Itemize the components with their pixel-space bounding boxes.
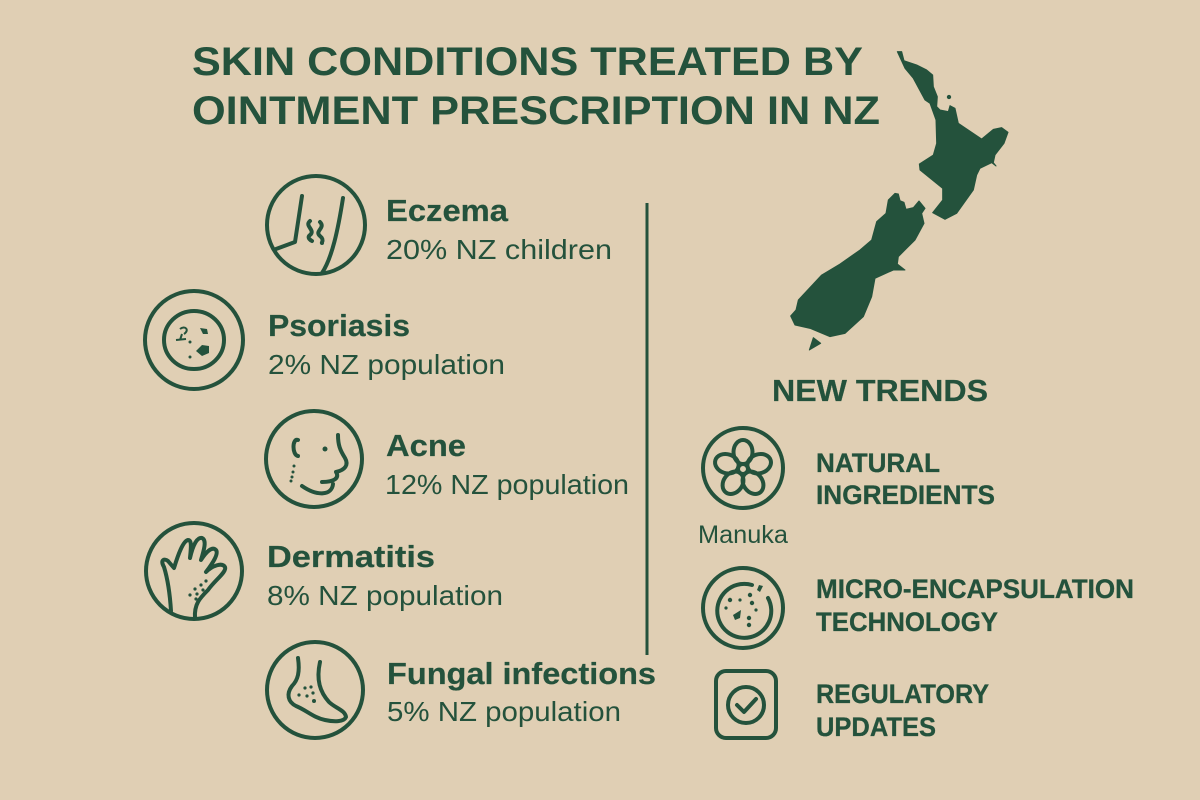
icon: elbow — [267, 176, 365, 274]
stat: Eczema: 20% NZ children — [386, 234, 612, 265]
label: Regulatory updates: REGULATORY — [816, 679, 989, 709]
trend: Natural ingredients — [698, 428, 995, 549]
title — [192, 40, 880, 133]
label: Eczema: Eczema — [386, 193, 509, 228]
icon: flower — [703, 428, 783, 508]
condition: Fungal infections — [267, 642, 656, 738]
condition: Dermatitis — [146, 523, 503, 619]
trend: Natural ingredients: INGREDIENTS — [816, 480, 995, 510]
condition: Psoriasis — [145, 291, 505, 389]
icon: skin patches — [145, 291, 243, 389]
stat: Dermatitis: 8% NZ population — [267, 580, 503, 611]
title: OINTMENT PRESCRIPTION IN NZ — [192, 89, 880, 133]
icon: foot — [267, 642, 363, 738]
stat: Psoriasis: 2% NZ population — [268, 349, 505, 380]
label: Natural ingredients: NATURAL — [816, 448, 940, 478]
stat: Acne: 12% NZ population — [385, 469, 629, 500]
stat: Fungal infections: 5% NZ population — [387, 696, 621, 727]
map: New Zealand — [791, 52, 1008, 350]
title: SKIN CONDITIONS TREATED BY — [192, 40, 863, 84]
trend: Regulatory updates: UPDATES — [816, 712, 936, 742]
heading: New Trends: NEW TRENDS — [772, 373, 988, 408]
icon: face profile — [266, 411, 362, 507]
divider — [646, 203, 648, 655]
label: Fungal infections: Fungal infections — [387, 656, 656, 691]
trend: Regulatory updates — [716, 671, 989, 742]
trend: Micro-encapsulation technology — [703, 568, 1134, 648]
condition: Eczema — [267, 176, 612, 274]
label: Acne: Acne — [386, 428, 466, 463]
icon: check box — [716, 671, 776, 738]
icon: hand — [146, 523, 242, 619]
trend: Micro-encapsulation technology: TECHNOLOGY — [816, 607, 998, 637]
label: Psoriasis: Psoriasis — [268, 308, 410, 343]
caption: Manuka: Manuka — [698, 521, 788, 549]
label: Dermatitis: Dermatitis — [267, 539, 435, 574]
icon: capsule particles — [703, 568, 783, 648]
condition: Acne — [266, 411, 629, 507]
label: Micro-encapsulation technology: MICRO-ENCAPSULATION — [816, 574, 1134, 604]
